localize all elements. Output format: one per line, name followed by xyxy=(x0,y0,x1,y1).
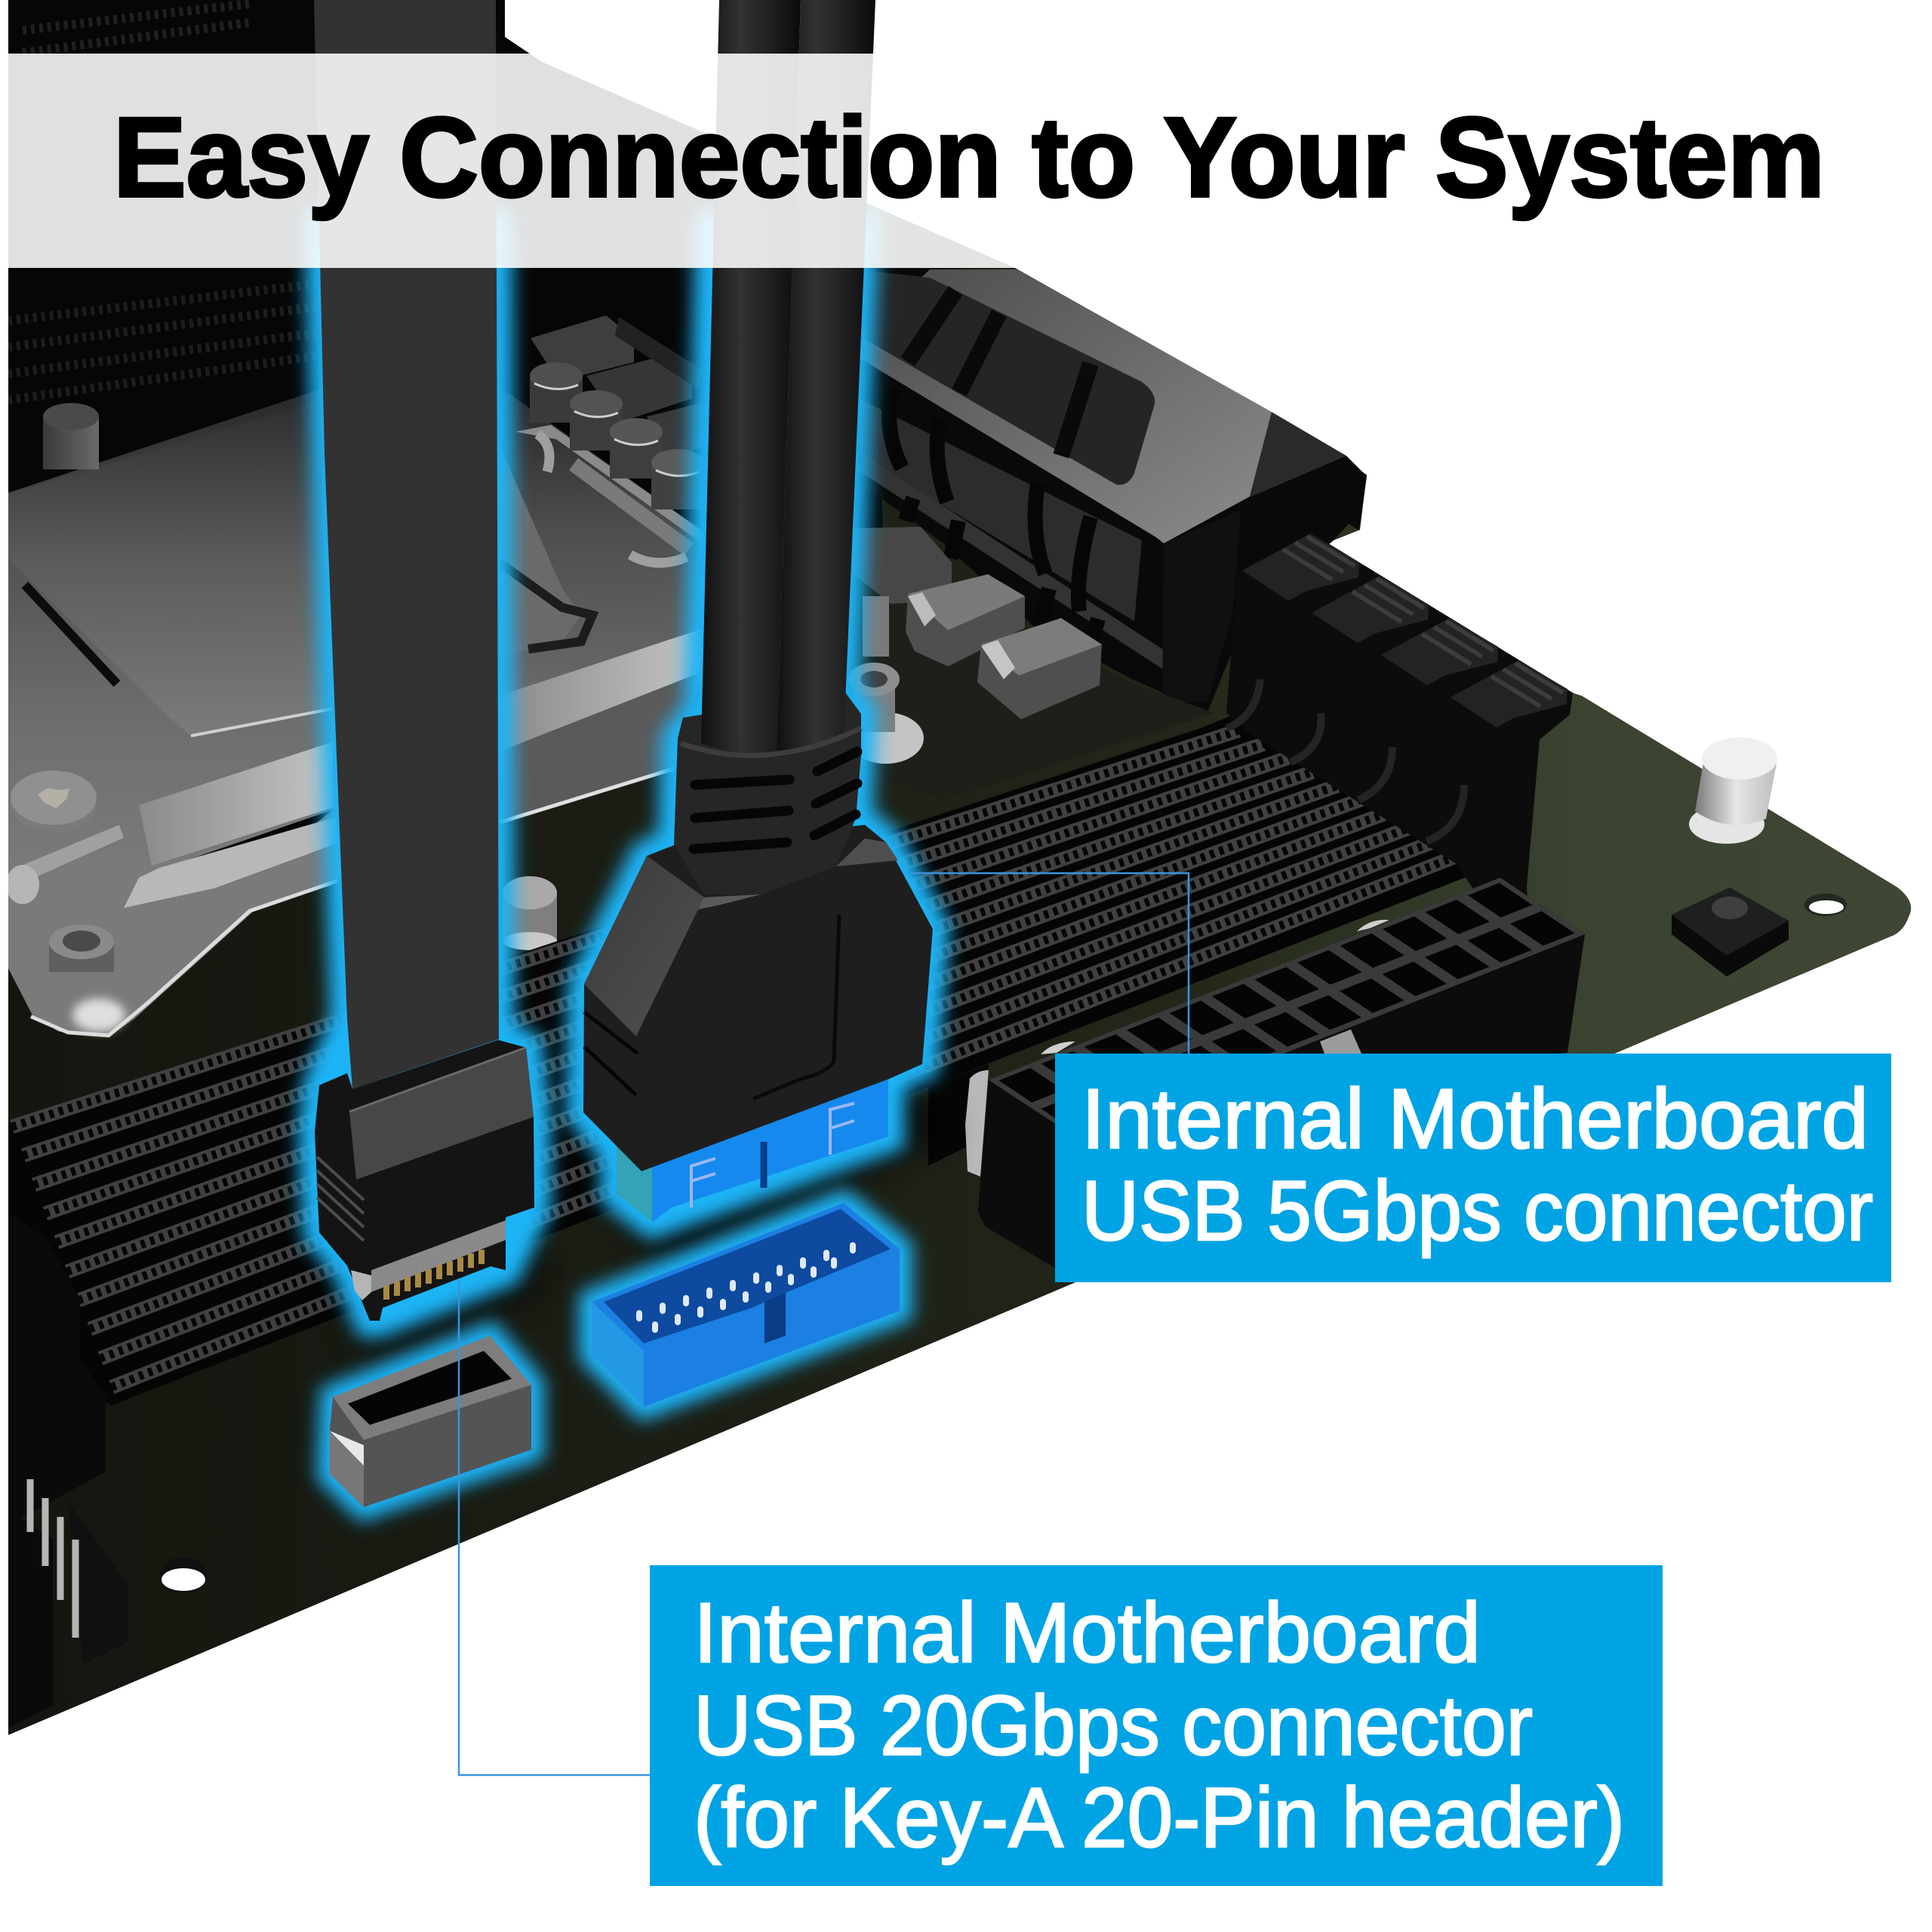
connector cells xyxy=(999,883,1574,1131)
fan pin header xyxy=(8,1479,128,1728)
plug right facet xyxy=(836,838,898,866)
screw xyxy=(11,771,97,832)
blue 20-pin header xyxy=(592,1203,900,1407)
plug top sliver xyxy=(698,894,761,909)
window fins xyxy=(908,291,1091,456)
callout: 5Gbps connector xyxy=(1055,1054,1891,1282)
top left memory slots xyxy=(8,4,325,400)
connector latch tab xyxy=(1320,1029,1361,1054)
heatsink underside xyxy=(1162,510,1241,702)
connector top frame xyxy=(989,878,1585,1137)
slot teeth xyxy=(12,731,1461,1387)
cyan glow ribbon xyxy=(315,226,534,1321)
VRM heatsink xyxy=(860,268,1367,712)
header notch xyxy=(764,1293,786,1343)
left dark connector xyxy=(8,1212,106,1524)
retention frame strip xyxy=(515,425,704,545)
socket lid right xyxy=(505,459,580,649)
latch top two xyxy=(1312,576,1429,643)
tongue slit xyxy=(761,1142,767,1188)
memory slot latches xyxy=(1226,533,1573,917)
socket opening xyxy=(348,1351,512,1425)
socket corner notch xyxy=(499,562,592,649)
socket lid left xyxy=(9,558,315,735)
leader line: 5Gbps xyxy=(912,873,1189,1054)
small connectors behind capacitors xyxy=(531,315,707,460)
lit edge right xyxy=(507,630,699,747)
header pins xyxy=(639,1245,853,1330)
plug body xyxy=(315,1040,534,1321)
5Gbps blue tongue xyxy=(617,1041,888,1222)
fan connector two xyxy=(977,618,1102,719)
socket top xyxy=(333,1336,531,1440)
retention bar xyxy=(574,464,689,549)
shoulder highlight xyxy=(349,1048,526,1112)
capacitors behind ATX xyxy=(965,920,1389,1177)
socket glow xyxy=(330,1336,531,1507)
title band xyxy=(8,54,1932,268)
title: Easy Connection to Your System xyxy=(113,94,1825,220)
callout: 20Gbps connector: (for Key-A 20-Pin header) xyxy=(694,1770,1625,1865)
heatsink black body xyxy=(860,268,1367,712)
mounting ring xyxy=(49,924,114,972)
clamp left knob xyxy=(6,865,39,904)
heatsink lower rail xyxy=(860,462,1182,672)
20Gbps socket xyxy=(330,1336,531,1507)
plug black shell xyxy=(583,825,933,1171)
capacitor near socket xyxy=(43,403,99,469)
glow: cables and connectors xyxy=(315,226,951,1507)
plug left facet xyxy=(584,856,704,1036)
plug shoulder xyxy=(349,1048,534,1180)
tongue marks xyxy=(691,1103,854,1208)
callout: 5Gbps connector: Internal Motherboard xyxy=(1081,1072,1869,1166)
boot slots xyxy=(694,752,857,849)
socket frame xyxy=(8,386,704,1036)
lid edge xyxy=(191,709,333,736)
ATX power connector xyxy=(978,878,1585,1268)
header glow xyxy=(592,1203,900,1407)
connector body xyxy=(978,878,1585,1268)
socket body xyxy=(330,1336,531,1507)
cyan glow plug xyxy=(583,226,933,1222)
plug ribs xyxy=(317,1157,364,1241)
cable boot xyxy=(674,691,861,894)
header body xyxy=(592,1203,900,1407)
rail white line xyxy=(499,768,675,823)
callout: 20Gbps connector xyxy=(650,1565,1663,1886)
memory slots xyxy=(8,713,1509,1405)
flat ribbon cable xyxy=(314,0,499,1089)
bracket plate xyxy=(16,825,124,883)
callout: 5Gbps connector: USB 5Gbps connector xyxy=(1081,1164,1873,1258)
latch black mass xyxy=(1226,533,1573,917)
latch curves xyxy=(1226,679,1464,841)
leader line: 20Gbps xyxy=(459,1280,650,1775)
latch top three xyxy=(1381,618,1498,685)
lid left groove xyxy=(25,585,117,684)
upper dark board area xyxy=(8,0,883,543)
heatsink lower step xyxy=(860,399,1142,621)
plug centre seam xyxy=(753,915,839,1099)
dual round cable xyxy=(681,0,875,757)
heatsink end facet xyxy=(1250,412,1346,497)
mounting standoff xyxy=(848,596,924,764)
small capacitors xyxy=(530,362,704,509)
silver standoff xyxy=(503,876,557,950)
metal tip xyxy=(371,1220,506,1292)
board under fan connectors xyxy=(853,558,1215,800)
slot base xyxy=(8,713,1509,1405)
heatsink window xyxy=(860,270,1155,485)
socket white end xyxy=(330,1431,364,1507)
dark shadow xyxy=(332,1079,951,1351)
black band below slots xyxy=(928,1064,989,1166)
lever hook xyxy=(537,434,687,563)
20Gbps plug xyxy=(315,1040,534,1321)
heatsink lower fins xyxy=(889,389,1098,657)
slot bands xyxy=(12,731,1461,1387)
latch top four xyxy=(1451,660,1567,728)
header left side xyxy=(592,1302,644,1407)
header opening xyxy=(604,1209,891,1343)
callout: 20Gbps connector: Internal Motherboard xyxy=(694,1586,1481,1680)
tip white tab xyxy=(351,1270,371,1300)
plate highlight xyxy=(72,998,125,1032)
fan connector one xyxy=(906,574,1025,666)
callout: 20Gbps connector: USB 20Gbps connector xyxy=(694,1678,1533,1773)
heatsink grey face xyxy=(860,269,1272,543)
lit tube left xyxy=(139,742,333,866)
gold pins xyxy=(386,1250,481,1300)
board hole left xyxy=(160,1557,207,1593)
tactile button xyxy=(1672,888,1789,977)
plug bumps xyxy=(584,1012,638,1095)
5Gbps plug xyxy=(583,825,933,1171)
lit clamp arm xyxy=(124,817,338,908)
rail right xyxy=(509,676,690,817)
latch top one xyxy=(1242,534,1359,601)
CPU socket xyxy=(6,386,704,1036)
bottom plate edge xyxy=(31,881,338,1035)
white capacitor right xyxy=(1689,737,1777,844)
far connector xyxy=(853,527,952,604)
board hole right xyxy=(1804,894,1847,916)
black slit xyxy=(189,811,332,860)
